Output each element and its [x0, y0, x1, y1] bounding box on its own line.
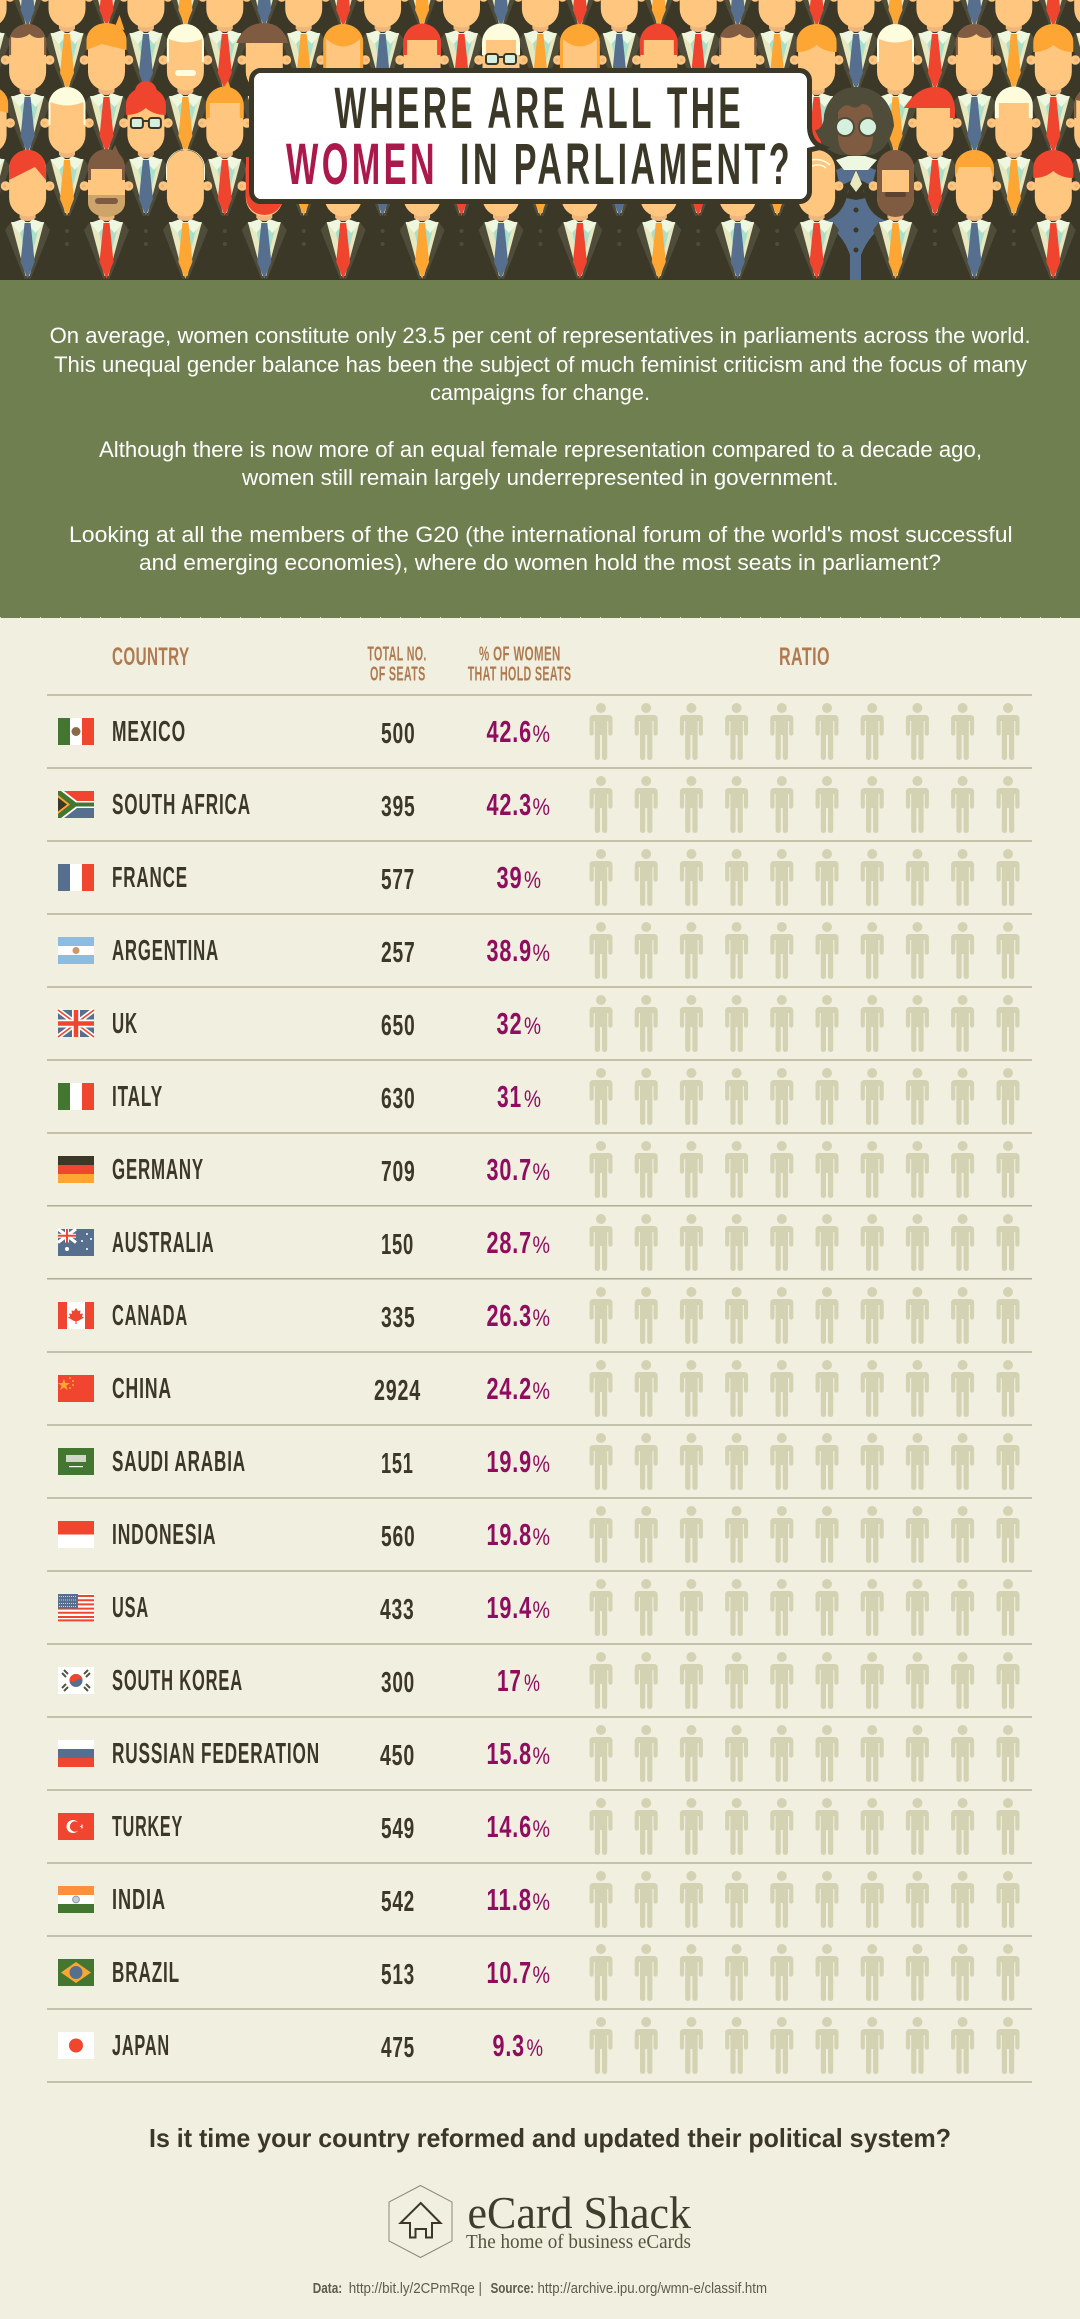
row: China — [58, 1360, 1020, 1417]
row: South Korea: % — [524, 1670, 540, 1697]
woman in blue outfit — [815, 87, 894, 280]
intro paragraph 2: Although there is now more of an equal female representation compared to a decade ago, — [99, 437, 982, 462]
data sources: Source: — [490, 2281, 534, 2297]
data sources: Data: — [313, 2281, 342, 2297]
row: Indonesia: % — [532, 1524, 550, 1551]
row: Saudi Arabia: 19.9 — [486, 1444, 532, 1479]
row: Brazil: 10.7 — [486, 1955, 532, 1990]
row: China: CHINA — [112, 1373, 172, 1405]
row: South Korea: 17 — [497, 1663, 522, 1698]
row: Germany — [58, 1141, 1020, 1198]
row: Japan — [58, 2017, 1020, 2074]
row: South Africa — [58, 776, 1020, 833]
row: Italy: % — [524, 1086, 541, 1113]
row: Mexico: 42.6 — [486, 714, 532, 749]
row: Russian Federation: % — [532, 1743, 550, 1770]
row: Saudi Arabia — [58, 1433, 1020, 1490]
row: Turkey: 14.6 — [486, 1809, 532, 1844]
row: UK: % — [524, 1013, 541, 1040]
data sources: http://archive.ipu.org/wmn-e/classif.htm — [538, 2281, 767, 2297]
flag: India — [58, 1886, 94, 1913]
row: Japan: 9.3 — [492, 2028, 525, 2063]
row: Brazil: BRAZIL — [112, 1957, 180, 1989]
row: Russian Federation: 15.8 — [486, 1736, 532, 1771]
flag: Mexico — [58, 718, 94, 745]
title speech bubble — [252, 70, 822, 202]
crowd row 3 — [0, 81, 1080, 246]
row: UK: 32 — [496, 1006, 522, 1041]
row: Canada: % — [532, 1305, 550, 1332]
row: Argentina: % — [532, 940, 550, 967]
intro paragraph 2 — [99, 437, 982, 490]
row: India: 542 — [381, 1886, 415, 1918]
row: France: 577 — [381, 864, 415, 896]
table header: OF SEATS — [370, 663, 426, 686]
row: USA: 19.4 — [486, 1590, 532, 1625]
flag: Germany — [58, 1156, 94, 1183]
table header: COUNTRY — [112, 643, 190, 671]
row: Italy: 31 — [497, 1079, 522, 1114]
row: Indonesia: 560 — [381, 1521, 416, 1553]
row: Turkey — [58, 1798, 1020, 1855]
row: South Africa: 395 — [381, 791, 416, 823]
table header: TOTAL NO. — [367, 643, 427, 666]
intro panel — [0, 280, 1080, 618]
table header: % OF WOMEN — [479, 643, 561, 666]
row: Brazil — [58, 1944, 1020, 2001]
flag: Brazil — [58, 1959, 94, 1986]
flag: Canada — [58, 1302, 94, 1329]
row: Canada: 335 — [381, 1302, 416, 1334]
row: Brazil: 513 — [381, 1959, 415, 1991]
row: Saudi Arabia: % — [532, 1451, 550, 1478]
row: Mexico: MEXICO — [112, 716, 186, 748]
intro paragraph 2: women still remain largely underrepresented in government. — [241, 465, 838, 490]
intro paragraph 3 — [69, 522, 1013, 575]
flag: Japan — [58, 2032, 94, 2059]
row: South Korea: SOUTH KOREA — [112, 1665, 243, 1697]
title line 1: WHERE ARE ALL THE — [334, 76, 744, 141]
table header: RATIO — [779, 643, 830, 671]
flag: Italy — [58, 1083, 94, 1110]
header crowd illustration — [0, 0, 1080, 309]
closing question: Is it time your country reformed and updated their political system? — [149, 2123, 951, 2153]
row: Germany: % — [532, 1159, 550, 1186]
row: France — [58, 849, 1020, 906]
row: Australia: AUSTRALIA — [112, 1227, 214, 1259]
flag: Russian Federation — [58, 1740, 94, 1767]
flag: Turkey — [58, 1813, 94, 1840]
flag: South Korea — [58, 1667, 94, 1694]
intro paragraph 1: On average, women constitute only 23.5 per cent of representatives in parliaments across the world. — [50, 323, 1031, 348]
row: Saudi Arabia: SAUDI ARABIA — [112, 1446, 246, 1478]
intro paragraph 1: campaigns for change. — [430, 380, 650, 405]
row: Argentina: 38.9 — [486, 933, 532, 968]
row: Canada: 26.3 — [486, 1298, 532, 1333]
row: USA: 433 — [380, 1594, 414, 1626]
row: China: 2924 — [374, 1375, 421, 1407]
row: Japan: JAPAN — [112, 2030, 170, 2062]
row: Indonesia — [58, 1506, 1020, 1563]
crowd row 0 — [1, 0, 1080, 57]
row: India: INDIA — [112, 1884, 166, 1916]
row: Germany: 709 — [381, 1156, 416, 1188]
row: Mexico: % — [532, 721, 550, 748]
row: Italy: 630 — [381, 1083, 416, 1115]
flag: France — [58, 864, 94, 891]
logo: eCard Shack — [389, 2186, 691, 2258]
row: Australia: % — [532, 1232, 550, 1259]
intro paragraph 3: Looking at all the members of the G20 (the international forum of the world's most successful — [69, 522, 1013, 547]
intro paragraph 1 — [50, 323, 1031, 405]
row: South Korea — [58, 1652, 1020, 1709]
data sources: http://bit.ly/2CPmRqe | — [349, 2281, 482, 2297]
row: Canada: CANADA — [112, 1300, 188, 1332]
row: USA: % — [532, 1597, 550, 1624]
table header: THAT HOLD SEATS — [468, 663, 571, 686]
row: Germany: 30.7 — [486, 1152, 532, 1187]
intro paragraph 1: This unequal gender balance has been the subject of much feminist criticism and the focus of many — [54, 352, 1028, 377]
row: Russian Federation — [58, 1725, 1020, 1782]
row: Mexico: 500 — [381, 718, 416, 750]
row: India: 11.8 — [486, 1882, 532, 1917]
row: USA — [58, 1579, 1020, 1636]
flag: USA — [58, 1594, 94, 1621]
row: Italy — [58, 1068, 1020, 1125]
row: Turkey: TURKEY — [112, 1811, 183, 1843]
row: South Africa: SOUTH AFRICA — [112, 789, 251, 821]
row: China: % — [532, 1378, 550, 1405]
row: Russian Federation: 450 — [380, 1740, 415, 1772]
row: South Korea: 300 — [381, 1667, 415, 1699]
flag: UK — [58, 1010, 94, 1037]
row: Argentina: ARGENTINA — [112, 935, 219, 967]
row: India — [58, 1871, 1020, 1928]
row: Australia: 150 — [381, 1229, 414, 1261]
row: Turkey: 549 — [381, 1813, 415, 1845]
title line 2 accent: WOMEN — [286, 132, 438, 197]
row: Turkey: % — [532, 1816, 550, 1843]
flag: South Africa — [58, 791, 94, 818]
row: Argentina — [58, 922, 1020, 979]
title line 2: IN PARLIAMENT? — [460, 132, 793, 197]
icon: hexagon house — [389, 2186, 452, 2258]
row: UK: 650 — [381, 1010, 416, 1042]
row: UK: UK — [112, 1008, 138, 1040]
row: Indonesia: INDONESIA — [112, 1519, 216, 1551]
flag: Australia — [58, 1229, 94, 1256]
table header — [112, 643, 830, 686]
row: China: 24.2 — [486, 1371, 532, 1406]
crowd row 4 — [1, 145, 1080, 309]
row: Mexico — [58, 703, 1020, 760]
row: South Africa: 42.3 — [486, 787, 532, 822]
crowd row 2 — [1, 15, 1080, 183]
logo wordmark: eCard Shack — [468, 2188, 691, 2238]
row: Italy: ITALY — [112, 1081, 163, 1113]
row: Japan: % — [526, 2035, 543, 2062]
row: UK — [58, 995, 1020, 1052]
flag: Saudi Arabia — [58, 1448, 94, 1475]
row: Australia: 28.7 — [486, 1225, 532, 1260]
row: Russian Federation: RUSSIAN FEDERATION — [112, 1738, 320, 1770]
row: Japan: 475 — [381, 2032, 415, 2064]
row: Argentina: 257 — [381, 937, 416, 969]
row: France: 39 — [496, 860, 522, 895]
row: India: % — [532, 1889, 550, 1916]
crowd row 1 — [0, 0, 1080, 120]
logo tagline: The home of business eCards — [466, 2231, 691, 2253]
row: South Africa: % — [532, 794, 550, 821]
flag: China — [58, 1375, 94, 1402]
intro paragraph 3: and emerging economies), where do women hold the most seats in parliament? — [139, 550, 941, 575]
row: Brazil: % — [532, 1962, 550, 1989]
row: Canada — [58, 1287, 1020, 1344]
row: France: % — [524, 867, 541, 894]
row: USA: USA — [112, 1592, 149, 1624]
flag: Argentina — [58, 937, 94, 964]
row: Australia — [58, 1214, 1020, 1271]
row: France: FRANCE — [112, 862, 188, 894]
row: Germany: GERMANY — [112, 1154, 204, 1186]
row: Indonesia: 19.8 — [486, 1517, 532, 1552]
row: Saudi Arabia: 151 — [381, 1448, 414, 1480]
data sources — [313, 2281, 767, 2297]
flag: Indonesia — [58, 1521, 94, 1548]
